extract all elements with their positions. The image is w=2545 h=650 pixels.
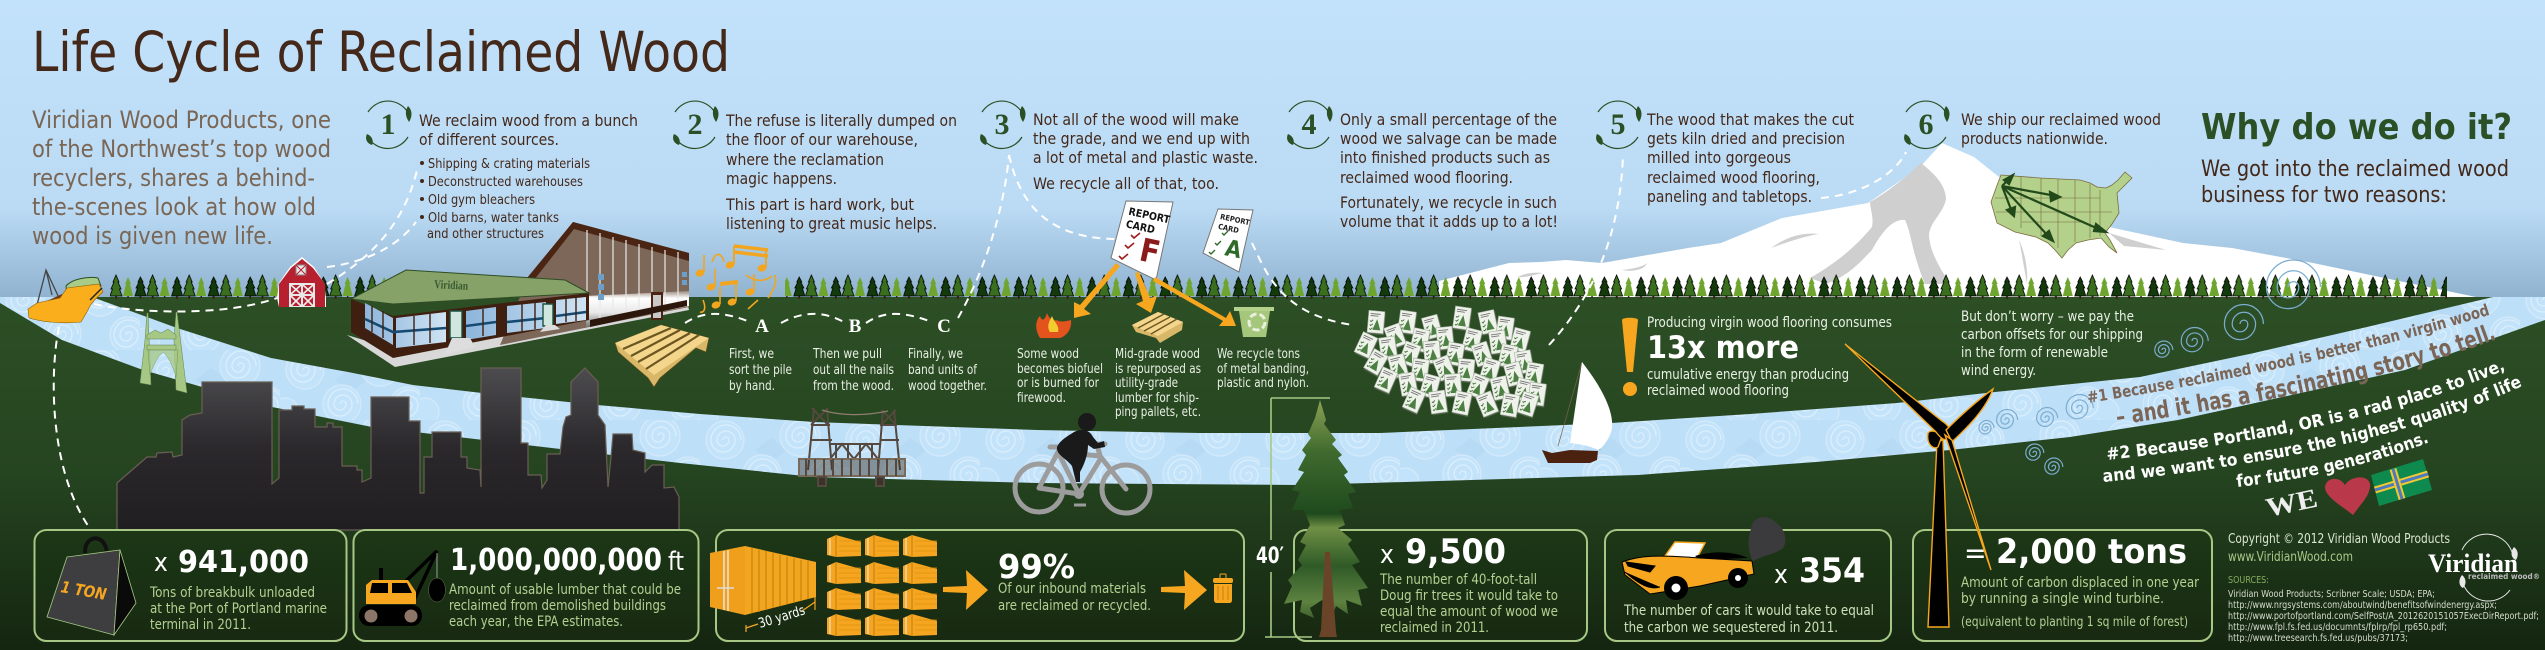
step 5 — [1596, 101, 1854, 206]
caption A — [729, 347, 792, 394]
Steel bridge — [799, 408, 905, 486]
step 4: Fortunately, we recycle in such — [1340, 193, 1557, 212]
step 4: 4 — [1302, 108, 1316, 141]
panel: one ton stat: terminal in 2011. — [150, 617, 251, 633]
step 6: products nationwide. — [1961, 129, 2108, 148]
caption biofuel: firewood. — [1017, 391, 1066, 406]
icon: exclamation mark — [1622, 318, 1638, 396]
panel: 99 percent stat: 99% — [998, 547, 1075, 586]
arrow — [943, 570, 988, 610]
music notes — [695, 246, 776, 312]
copyright block: www.ViridianWood.com — [2228, 549, 2353, 565]
step 5: milled into gorgeous — [1647, 148, 1791, 167]
caption B: out all the nails — [813, 363, 894, 378]
caption recycle: of metal banding, — [1217, 362, 1309, 377]
caption B: Then we pull — [812, 347, 882, 362]
callout: 13x more: reclaimed wood flooring — [1647, 383, 1789, 399]
caption A: First, we — [729, 347, 774, 362]
we love Portland flag: WE — [2263, 483, 2320, 523]
panel: cars stat: x — [1774, 560, 1788, 590]
callout: 13x more: 13x more — [1647, 330, 1799, 366]
step 5: reclaimed wood flooring, — [1647, 168, 1820, 187]
panel: carbon stat — [1913, 530, 2212, 641]
icon: small pallet — [1132, 312, 1183, 343]
panel: cars stat: the carbon we sequestered in 2011. — [1624, 620, 1838, 636]
report card F: CARD — [1125, 218, 1156, 236]
wind text: in the form of renewable — [1961, 345, 2108, 361]
panel: one ton stat: 941,000 — [178, 545, 309, 580]
report card pile — [1353, 306, 1547, 419]
step 2: The refuse is literally dumped on — [725, 111, 957, 130]
step 2: This part is hard work, but — [725, 195, 914, 214]
panel: lumber stat — [354, 530, 698, 641]
reason #2: for future generations. — [2236, 436, 2428, 487]
arrow — [1161, 570, 1207, 610]
panel: fir stat: Doug fir trees it would take to — [1380, 588, 1558, 604]
intro text: Viridian Wood Products, one — [32, 106, 331, 134]
panel: fir stat: equal the amount of wood we — [1380, 604, 1558, 620]
sailboat — [1542, 362, 1612, 463]
step 1: Old gym bleachers — [428, 192, 535, 208]
step 6 — [1904, 101, 2161, 148]
step 6: We ship our reclaimed wood — [1961, 110, 2161, 129]
wind swirls — [1979, 260, 2320, 474]
panel: lumber stat: ft — [668, 547, 684, 577]
ship — [28, 270, 103, 323]
map of USA — [1991, 172, 2132, 258]
rider — [1057, 413, 1105, 482]
icon: shipping container — [710, 546, 816, 632]
barn — [277, 257, 326, 307]
caption mid-grade: ping pallets, etc. — [1115, 405, 1201, 420]
caption mid-grade: utility-grade — [1115, 376, 1178, 391]
panel: one ton stat: x — [154, 548, 168, 578]
wind text: wind energy. — [1961, 363, 2036, 379]
caption A: by hand. — [729, 379, 775, 394]
big pallet — [615, 325, 709, 387]
sky background — [0, 0, 2545, 297]
step 5: The wood that makes the cut — [1646, 110, 1854, 129]
Viridian logo: Viridian — [2428, 549, 2519, 578]
panel: fir stat: The number of 40-foot-tall — [1379, 572, 1537, 588]
intro text — [32, 106, 331, 250]
step 3: 3 — [994, 108, 1010, 141]
panel: lumber stat: reclaimed from demolished buildings — [449, 598, 666, 614]
caption biofuel: Some wood — [1017, 347, 1079, 362]
panel: carbon stat: 2,000 tons — [1996, 532, 2187, 572]
step 2: the floor of our warehouse, — [726, 130, 918, 149]
intro text: of the Northwest’s top wood — [32, 135, 331, 163]
panel: one ton stat: at the Port of Portland marine — [150, 601, 327, 617]
bicycle rider — [1015, 413, 1150, 513]
step 3: the grade, and we end up with — [1033, 129, 1250, 148]
panel: carbon stat: Amount of carbon displaced in one year — [1961, 575, 2200, 591]
caption B — [812, 347, 894, 394]
why text: business for two reasons: — [2201, 183, 2447, 208]
why text: We got into the reclaimed wood — [2201, 157, 2509, 182]
40 foot dimension — [1256, 398, 1330, 637]
report card A — [1203, 209, 1253, 272]
St Johns bridge — [140, 312, 187, 393]
report card F — [1111, 201, 1173, 280]
step 1: and other structures — [427, 226, 544, 242]
40 foot dimension: 40′ — [1256, 544, 1284, 569]
icon: recycling bin — [1234, 307, 1274, 337]
caption C: band units of — [908, 363, 978, 378]
letter A: A — [755, 316, 769, 337]
caption biofuel: becomes biofuel — [1017, 362, 1103, 377]
caption mid-grade: lumber for ship- — [1115, 391, 1199, 406]
caption mid-grade: Mid-grade wood — [1115, 347, 1200, 362]
panel: carbon stat: by running a single wind turbine. — [1961, 591, 2164, 607]
skyline — [117, 368, 679, 530]
step 4: into finished products such as — [1340, 148, 1550, 167]
why heading: Why do we do it? — [2201, 107, 2512, 148]
icon: convertible car — [1622, 542, 1754, 600]
step 3: We recycle all of that, too. — [1033, 174, 1219, 193]
reason #1: – and it has a fascinating story to tell. — [2116, 324, 2496, 422]
reason #2: and we want to ensure the highest quality of life — [2104, 378, 2522, 482]
step 1: Shipping & crating materials — [428, 156, 590, 172]
step 3 — [980, 101, 1258, 193]
report card A: REPORT — [1219, 212, 1251, 227]
step 3: a lot of metal and plastic waste. — [1033, 148, 1258, 167]
panel: 99 percent stat: are reclaimed or recycled. — [998, 598, 1151, 614]
panel: fir stat: reclaimed in 2011. — [1380, 620, 1489, 636]
icon: weight: 1 TON — [59, 577, 108, 604]
icon: shipping container: 30 yards — [756, 602, 807, 632]
report card F: F — [1136, 231, 1163, 272]
panel: carbon stat: = — [1964, 536, 1987, 571]
step 5: 5 — [1610, 108, 1626, 141]
caption mid-grade — [1115, 347, 1201, 420]
panel: 99 percent stat: Of our inbound materials — [998, 581, 1146, 597]
icon: heart — [2325, 477, 2370, 515]
caption biofuel: or is burned for — [1017, 376, 1099, 391]
panel: one ton stat — [34, 530, 346, 641]
step 2 — [673, 101, 957, 233]
copyright block: Copyright © 2012 Viridian Wood Products — [2228, 531, 2450, 547]
caption C — [908, 347, 987, 394]
panel: fir stat — [1294, 530, 1587, 641]
callout: 13x more: Producing virgin wood flooring consumes — [1647, 315, 1892, 331]
step 2: magic happens. — [726, 169, 837, 188]
icon: trash can — [1213, 574, 1233, 603]
panel: cars stat: 354 — [1799, 551, 1865, 591]
panel: fir stat: 9,500 — [1405, 532, 1506, 572]
tree line — [110, 274, 2447, 301]
title: Life Cycle of Reclaimed Wood — [32, 20, 730, 84]
step 1 — [366, 101, 638, 242]
wind text: But don’t worry – we pay the — [1961, 309, 2134, 325]
intro text: wood is given new life. — [32, 222, 273, 250]
copyright block: http://www.treesearch.fs.fed.us/pubs/37173; — [2228, 633, 2408, 644]
panel: lumber stat: 1,000,000,000 — [450, 543, 662, 578]
report card A: CARD — [1217, 222, 1240, 235]
intro text: recyclers, shares a behind- — [32, 164, 315, 192]
Viridian logo: reclaimed wood® — [2468, 572, 2540, 581]
panel: cars stat — [1605, 517, 1891, 641]
caption A: sort the pile — [729, 363, 792, 378]
warehouse: Viridian — [434, 277, 469, 293]
step 2: where the reclamation — [726, 150, 884, 169]
step 1: 1 — [380, 108, 396, 141]
reason #2: #2 Because Portland, OR is a rad place to live, — [2108, 364, 2504, 460]
step 1: Old barns, water tanks — [428, 210, 559, 226]
caption mid-grade: is repurposed as — [1115, 362, 1201, 377]
step 1: Deconstructed warehouses — [428, 174, 583, 190]
wind text — [1961, 309, 2143, 379]
letter B: B — [849, 316, 862, 337]
copyright block: http://www.fpl.fs.fed.us/documnts/fplrp/fpl_rp650.pdf; — [2228, 622, 2447, 633]
step 1: We reclaim wood from a bunch — [419, 111, 638, 130]
caption recycle — [1217, 347, 1309, 391]
report card A: A — [1223, 235, 1244, 264]
panel: lumber stat: Amount of usable lumber that could be — [449, 582, 681, 598]
reason #1: #1 Because reclaimed wood is better than virgin wood — [2088, 303, 2490, 403]
letter C: C — [937, 316, 951, 337]
copyright block: Viridian Wood Products; Scribner Scale; USDA; EPA; — [2228, 589, 2435, 600]
intro text: the-scenes look at how old — [32, 193, 316, 221]
copyright block: http://www.nrgsystems.com/aboutwind/benefitsofwindenergy.aspx; — [2228, 600, 2497, 611]
step 4: wood we salvage can be made — [1340, 129, 1557, 148]
dashed route — [54, 152, 1906, 530]
caption B: from the wood. — [813, 379, 894, 394]
wind turbine — [1845, 344, 1993, 627]
step 4: volume that it adds up to a lot! — [1340, 212, 1558, 231]
callout: 13x more: cumulative energy than producing — [1647, 367, 1849, 383]
icon: smoke — [1749, 517, 1785, 562]
caption recycle: plastic and nylon. — [1217, 376, 1309, 391]
step 3: Not all of the wood will make — [1033, 110, 1239, 129]
step 4: Only a small percentage of the — [1340, 110, 1557, 129]
icon: weight — [47, 538, 136, 635]
panel: 99 percent stat — [710, 530, 1244, 641]
ground — [0, 297, 2545, 650]
Doug fir tree — [1284, 400, 1368, 637]
river — [0, 297, 2545, 485]
mountain — [1439, 143, 2476, 297]
panel: carbon stat: (equivalent to planting 1 sq mile of forest) — [1961, 615, 2188, 630]
icon: Portland flag — [2371, 459, 2432, 506]
step 2: listening to great music helps. — [726, 214, 937, 233]
panel: lumber stat: each year, the EPA estimates. — [449, 614, 623, 630]
caption recycle: We recycle tons — [1217, 347, 1300, 362]
why text — [2201, 157, 2509, 208]
caption biofuel — [1017, 347, 1103, 406]
orange arrows — [1074, 263, 1236, 326]
caption C: Finally, we — [908, 347, 963, 362]
panel: fir stat: x — [1380, 540, 1394, 570]
icon: fire — [1036, 313, 1071, 338]
step 5: gets kiln dried and precision — [1647, 129, 1845, 148]
caption C: wood together. — [908, 379, 987, 394]
small containers — [827, 535, 937, 636]
panel: cars stat: The number of cars it would take to equal — [1623, 603, 1874, 619]
step 4 — [1287, 101, 1558, 231]
step 2: 2 — [688, 108, 702, 141]
icon: crane — [359, 551, 446, 626]
step 6: 6 — [1918, 108, 1934, 141]
panel: one ton stat: Tons of breakbulk unloaded — [149, 585, 315, 601]
we love Portland flag — [2263, 459, 2432, 523]
warehouse — [347, 222, 689, 367]
step 4: reclaimed wood flooring. — [1340, 168, 1513, 187]
step 5: paneling and tabletops. — [1647, 187, 1812, 206]
Viridian logo — [2428, 534, 2540, 601]
step 1: of different sources. — [419, 130, 559, 149]
callout: 13x more — [1622, 315, 1892, 399]
report card F: REPORT — [1127, 206, 1171, 226]
copyright block: SOURCES: — [2228, 575, 2269, 586]
copyright block — [2228, 531, 2539, 644]
wind text: carbon offsets for our shipping — [1961, 327, 2143, 343]
